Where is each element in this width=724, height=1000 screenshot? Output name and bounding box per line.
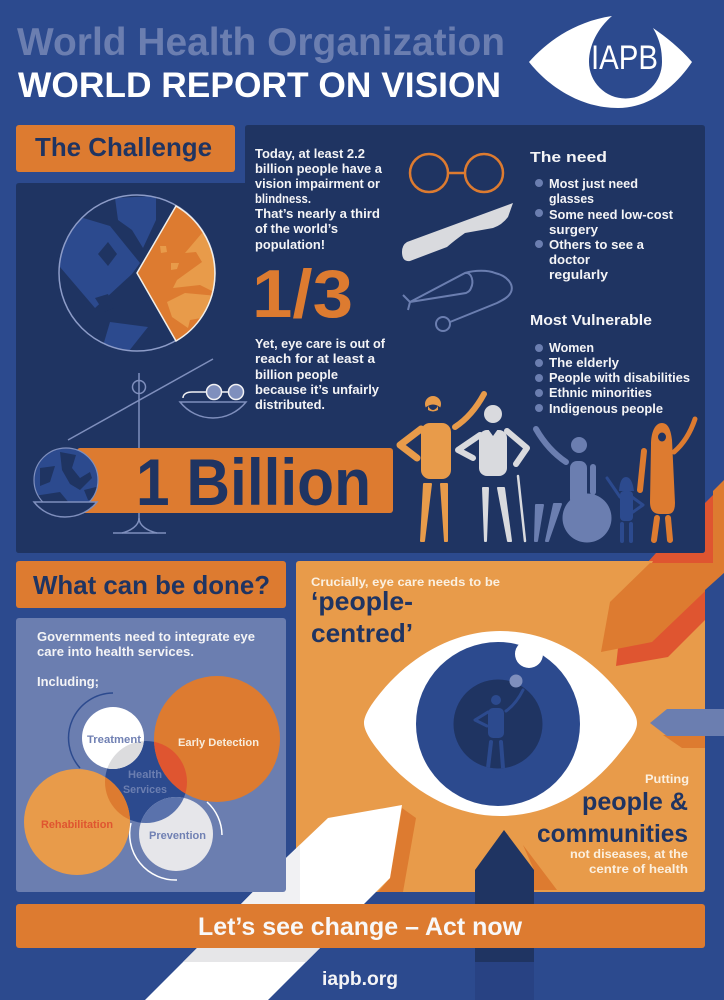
text: people and communities: not diseases, at the <box>570 847 688 861</box>
text: out of reach: billion people <box>255 368 338 382</box>
text: 2.2 billion: That’s nearly a third <box>255 207 380 221</box>
heading tab: What can be done: What can be done? <box>33 570 270 600</box>
text: 2.2 billion: population! <box>255 238 325 252</box>
footer url: iapb.org <box>322 969 398 990</box>
callout: 1 Billion: 1 Billion <box>136 445 371 519</box>
panel: people-centred <box>140 555 724 1000</box>
text: people-centred: ‘people- <box>311 586 413 616</box>
arrow: white <box>140 800 416 1000</box>
text: 2.2 billion: Today, at least 2.2 <box>255 147 365 161</box>
text: out of reach <box>255 337 386 412</box>
globe pie chart: one third <box>58 194 216 352</box>
title: World Health Organization <box>17 21 505 64</box>
figure: child <box>607 477 643 541</box>
list: most vulnerable: The elderly <box>549 356 619 370</box>
icon: central eye <box>364 631 637 816</box>
list: most vulnerable: People with disabilities <box>549 371 690 385</box>
figure: woman in robe <box>640 419 695 540</box>
text: people and communities <box>537 772 689 876</box>
text: out of reach: because it’s unfairly <box>255 383 379 397</box>
panel: the challenge <box>16 125 705 553</box>
text: 2.2 billion: vision impairment or <box>255 177 380 191</box>
list: the need: The need <box>530 150 607 166</box>
list: the need <box>530 150 674 282</box>
list: the need: doctor <box>549 253 590 267</box>
text: governments: Including; <box>37 675 99 689</box>
text: governments: care into health services. <box>37 645 194 659</box>
list: the need: Others to see a <box>549 238 645 252</box>
list: the need: regularly <box>549 268 608 282</box>
text: people and communities: communities <box>537 820 688 848</box>
heading tab: The Challenge: The Challenge <box>35 132 212 162</box>
title <box>17 21 505 105</box>
figure: wheelchair user <box>535 429 612 542</box>
list: most vulnerable: Most Vulnerable <box>530 313 652 329</box>
arrow: right periwinkle <box>650 709 724 748</box>
list: most vulnerable: Ethnic minorities <box>549 386 652 400</box>
text: 2.2 billion: of the world’s <box>255 222 338 236</box>
figure: elderly person with cane <box>458 405 527 541</box>
text: out of reach: distributed. <box>255 398 325 412</box>
text: governments: Governments need to integrate eye <box>37 630 255 644</box>
heading tab: What can be done <box>16 561 286 608</box>
list: the need: surgery <box>549 223 598 237</box>
venn diagram: health services <box>24 676 280 880</box>
arrow: bottom navy <box>475 830 557 1000</box>
list: the need: Most just need <box>549 177 638 191</box>
venn diagram: health services: Prevention <box>149 830 206 842</box>
icon: stethoscope <box>403 271 512 331</box>
icon: scalpel <box>402 203 513 261</box>
logo: IAPB eye: IAPB <box>591 39 658 77</box>
list: the need: Some need low-cost <box>549 208 674 222</box>
figure inside pupil <box>475 690 523 768</box>
list: most vulnerable: Indigenous people <box>549 402 663 416</box>
banner: call to action <box>16 904 705 948</box>
text: people-centred: Crucially, eye care needs to be <box>311 575 500 589</box>
text: people-centred <box>311 575 500 648</box>
text: 2.2 billion <box>255 147 383 252</box>
text: people and communities: people & <box>582 788 688 816</box>
venn diagram: health services: Services <box>123 784 167 796</box>
venn diagram: health services: Early Detection <box>178 737 259 749</box>
text: out of reach: reach for at least a <box>255 352 376 366</box>
venn diagram: health services: Rehabilitation <box>41 819 113 831</box>
text: 2.2 billion: blindness. <box>255 192 311 206</box>
venn diagram: health services: Treatment <box>87 734 141 746</box>
list: most vulnerable <box>530 313 690 416</box>
list: most vulnerable: Women <box>549 341 594 355</box>
icon: glasses <box>410 154 503 192</box>
panel: what can be done <box>16 618 286 892</box>
icon: balance scale <box>68 359 246 533</box>
icon: small globe in scale pan <box>34 448 100 517</box>
venn diagram: health services: Health <box>128 769 162 781</box>
banner: call to action: Let’s see change – Act now <box>198 913 523 941</box>
number: 1/3: 1/3 <box>252 256 353 332</box>
arrow: red and orange shaft behind panels <box>647 480 724 590</box>
logo: IAPB eye <box>529 16 692 108</box>
text: people-centred: centred’ <box>311 618 413 648</box>
text: out of reach: Yet, eye care is out of <box>255 337 386 351</box>
text: 2.2 billion: billion people have a <box>255 162 383 176</box>
heading tab: The Challenge <box>16 125 235 172</box>
figure: man with turban <box>400 394 484 541</box>
text: governments <box>37 630 255 689</box>
text: people and communities: Putting <box>645 772 689 786</box>
list: the need: glasses <box>549 192 594 206</box>
text: people and communities: centre of health <box>589 862 688 876</box>
title: WORLD REPORT ON VISION <box>18 66 501 105</box>
arrow: top right orange and red <box>601 555 724 1000</box>
